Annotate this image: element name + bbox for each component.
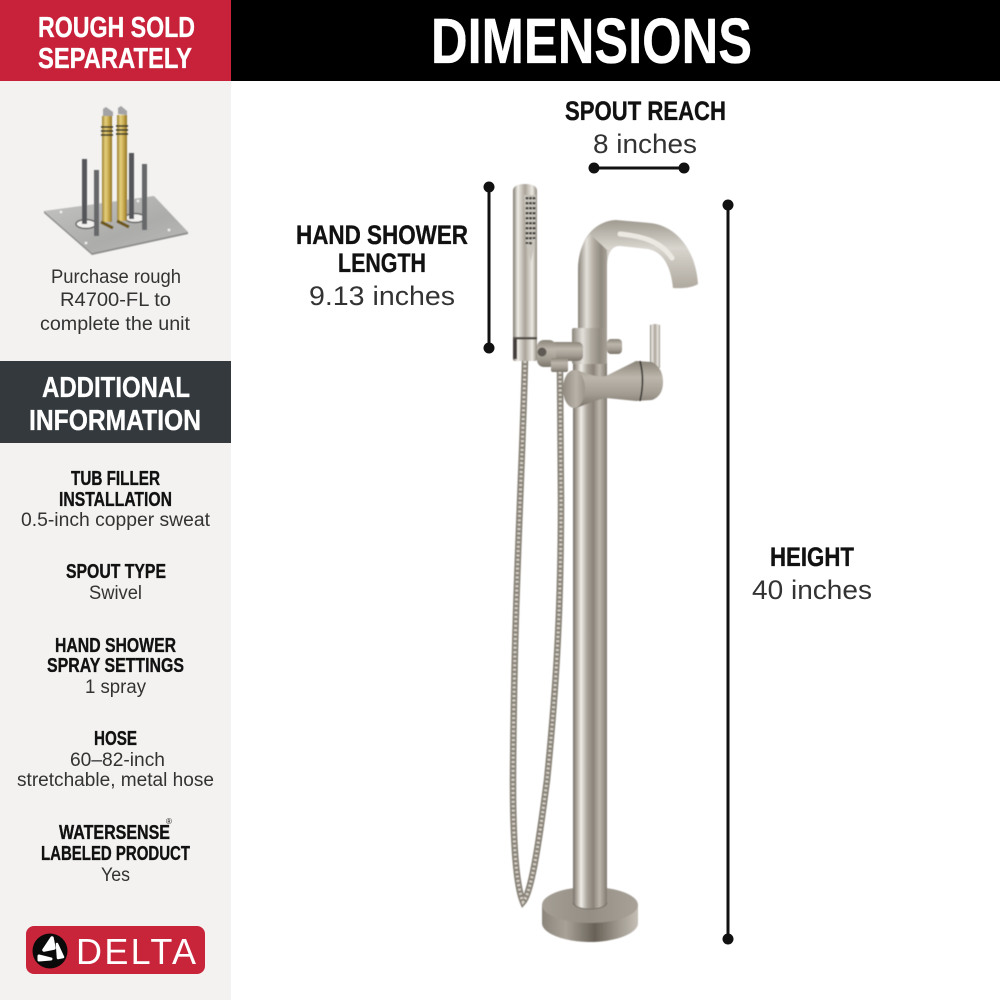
arrow: hand shower dimension line [484, 182, 494, 354]
spec: watersense labeled product: ® [166, 817, 172, 826]
heading: additional information [0, 361, 231, 443]
pole [573, 330, 607, 909]
arrow: height dimension line [722, 200, 734, 944]
label: hand shower length: HAND SHOWER [296, 220, 468, 250]
label: spout reach: SPOUT REACH [565, 96, 726, 126]
rough purchase note: R4700-FL to [60, 290, 171, 311]
mixer body [563, 361, 663, 408]
spec: watersense labeled product: WATERSENSE [59, 822, 170, 844]
spec: spout type: Swivel [89, 583, 142, 604]
spec: tub filler installation [21, 468, 211, 531]
faucet illustration [513, 184, 698, 942]
label: hand shower length: LENGTH [338, 248, 426, 278]
hand shower [513, 184, 537, 361]
rough purchase note: Purchase rough [51, 267, 181, 288]
collar [572, 328, 607, 364]
spec: hose [17, 728, 214, 791]
heading: additional information: ADDITIONAL [42, 372, 190, 404]
logo: delta: DELTA [76, 931, 196, 972]
handle lever [650, 324, 660, 368]
banner: rough sold separately: ROUGH SOLD [38, 12, 195, 44]
spec: hose: stretchable, metal hose [17, 770, 214, 791]
logo: delta [26, 926, 205, 974]
label: height: 40 inches [752, 575, 872, 605]
spec: hand shower spray settings: HAND SHOWER [55, 635, 176, 657]
spec: hose: HOSE [94, 728, 137, 750]
label: spout reach: 8 inches [593, 129, 697, 159]
hose connector [551, 358, 568, 372]
rough purchase note: complete the unit [40, 314, 191, 335]
arrow: spout reach dimension line [588, 162, 690, 174]
label: hand shower length: 9.13 inches [309, 281, 455, 311]
spec: hand shower spray settings: 1 spray [85, 677, 146, 698]
label: height: HEIGHT [770, 542, 854, 572]
side knob [607, 339, 622, 354]
spec: tub filler installation: INSTALLATION [59, 489, 172, 511]
rough valve product image [44, 106, 188, 255]
left sidebar background [0, 81, 231, 1000]
banner: rough sold separately: SEPARATELY [38, 43, 192, 75]
hand shower connector [537, 340, 583, 367]
heading: additional information: INFORMATION [29, 405, 201, 437]
title banner: dimensions [231, 0, 1000, 81]
label: spout reach [565, 96, 726, 159]
rough purchase note [40, 267, 191, 335]
spec: watersense labeled product: LABELED PRODUCT [41, 843, 190, 865]
label: height [752, 542, 872, 605]
base [542, 887, 638, 942]
spec: tub filler installation: TUB FILLER [71, 468, 160, 490]
spec: spout type [66, 561, 166, 604]
spec: watersense labeled product [41, 817, 190, 886]
spec: tub filler installation: 0.5-inch copper sweat [21, 510, 211, 531]
spec: spout type: SPOUT TYPE [66, 561, 166, 583]
spec: watersense labeled product: Yes [101, 865, 130, 886]
spec: hand shower spray settings: SPRAY SETTINGS [47, 655, 184, 677]
title banner: dimensions: DIMENSIONS [431, 5, 752, 77]
hose [513, 361, 561, 902]
spec: hose: 60–82-inch [70, 750, 165, 771]
spec: hand shower spray settings [47, 635, 184, 698]
label: hand shower length [296, 220, 468, 311]
spout [578, 220, 698, 332]
banner: rough sold separately [0, 0, 231, 81]
